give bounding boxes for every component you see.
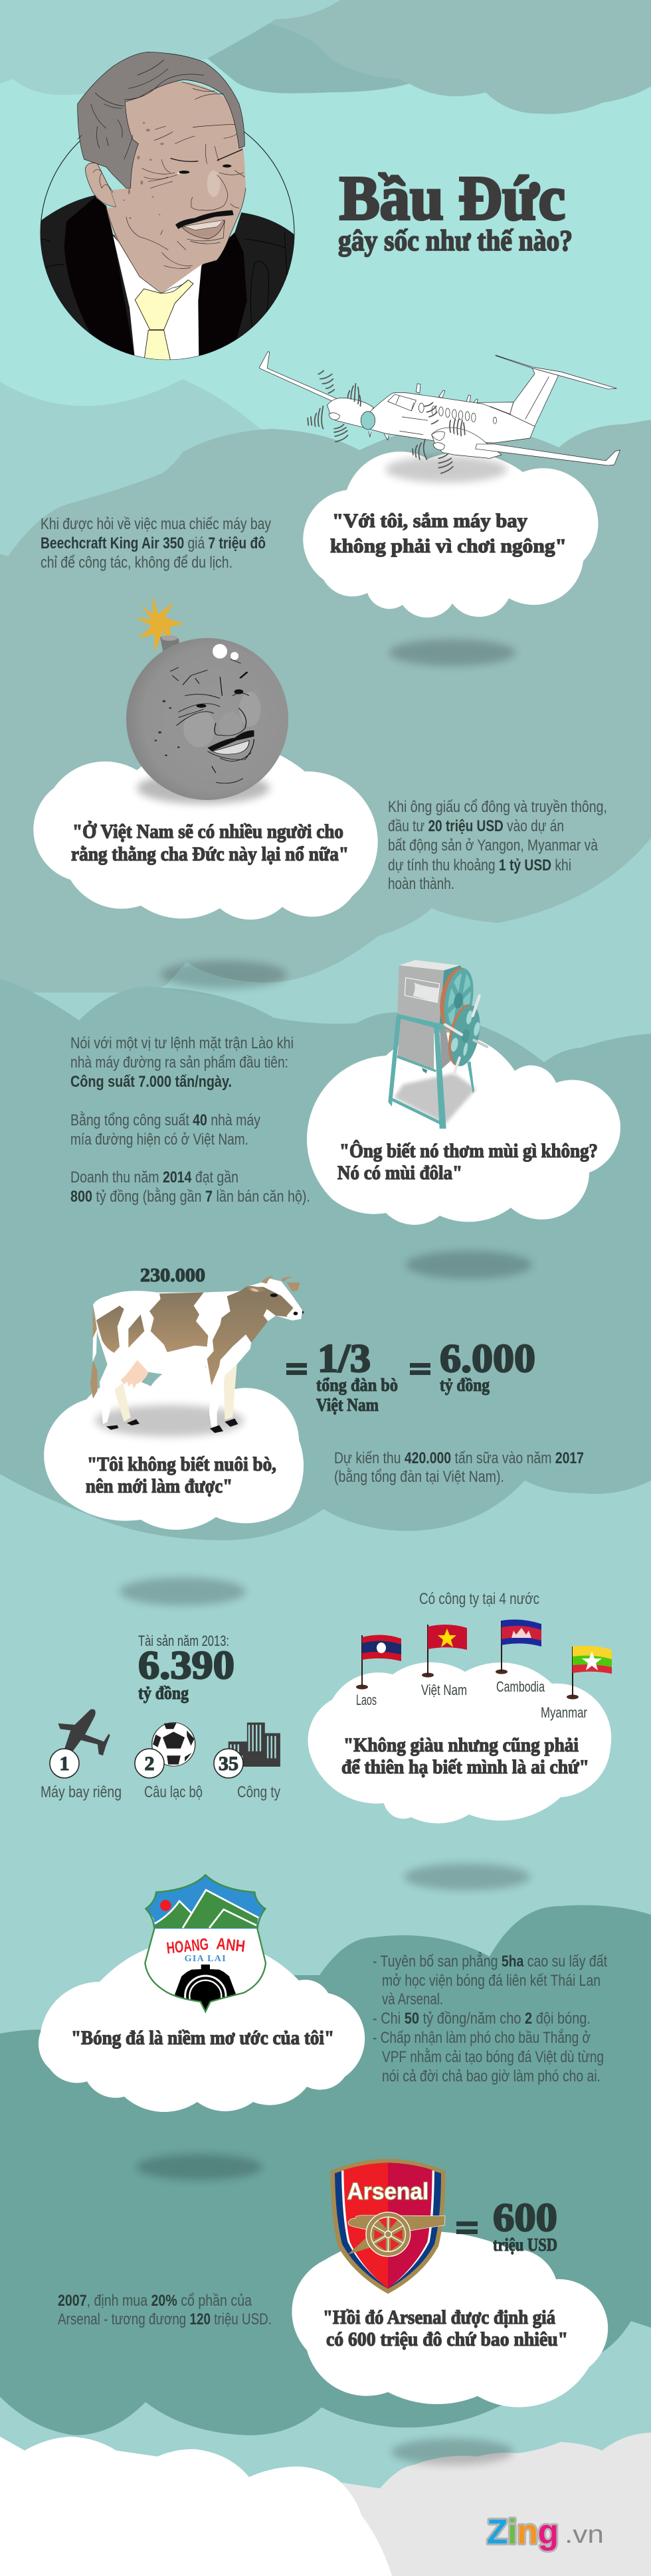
- quote: có 600 triệu đô chứ bao nhiêu": [326, 2328, 568, 2350]
- quote: "Ở Việt Nam sẽ có nhiều người cho: [72, 821, 343, 843]
- text: milk forecast: (bằng tổng đàn tại Việt Nam).: [334, 1468, 504, 1486]
- quote: [341, 1734, 589, 1778]
- icon group: plane, clubs, companies: [58, 1709, 280, 1767]
- icon: cow: [90, 1275, 304, 1433]
- flag: Cambodia: [496, 1619, 541, 1674]
- freckles: [123, 122, 164, 219]
- quote: "Với tôi, sắm máy bay: [332, 510, 527, 532]
- text: assets 2013: 6.390: [138, 1643, 234, 1687]
- text: football academy: [373, 1951, 607, 2085]
- equation: [286, 1336, 535, 1415]
- text: sugar mill facts: Công suất 7.000 tấn/ngày.: [70, 1073, 232, 1091]
- labels: assets: Công ty: [237, 1783, 280, 1801]
- equals sign: [286, 1363, 307, 1375]
- quote: [330, 510, 567, 557]
- text: Yangon investment: Khi ông giấu cổ đông và truyền thông,: [388, 798, 607, 816]
- text: sugar mill facts: [70, 1034, 310, 1206]
- portrait circle outline: [41, 106, 294, 360]
- cloud: cow quote: [44, 1365, 304, 1530]
- text: assets 2013: Tài sản năm 2013:: [138, 1633, 229, 1649]
- background cloud band: mid: [0, 979, 651, 1540]
- cloud: plane quote: [303, 451, 598, 617]
- labels: countries: Laos: [356, 1692, 377, 1708]
- club name: ANH: [215, 1935, 246, 1956]
- eyebrows: [171, 149, 242, 161]
- text: plane purchase: Khi được hỏi về việc mua chiếc máy bay: [41, 515, 271, 533]
- icon: bomb with face: [126, 596, 288, 800]
- label: total herd: tổng đàn bò: [316, 1375, 398, 1395]
- text: plane purchase: Beechcraft King Air 350 giá 7 triệu đô: [41, 534, 266, 552]
- text: companies in 4 countries: Có công ty tại 4 nước: [419, 1590, 539, 1608]
- quote: nên mới làm được": [86, 1475, 232, 1497]
- ear: [85, 163, 116, 207]
- eyes: [179, 171, 189, 174]
- text: sugar mill facts: Doanh thu năm 2014 đạt gần: [70, 1168, 238, 1186]
- quote: [337, 1140, 598, 1184]
- title: [338, 164, 573, 257]
- club name: HOANG: [165, 1935, 209, 1958]
- icon: plane: [58, 1709, 110, 1755]
- logo: Zing.vn: Zing: [487, 2513, 559, 2551]
- quote: "Không giàu nhưng cũng phải: [343, 1734, 579, 1756]
- cow shadow: [95, 1405, 244, 1437]
- logo: Zing.vn: .vn: [565, 2521, 604, 2549]
- quote: để thiên hạ biết mình là ai chứ": [341, 1756, 589, 1778]
- text: Yangon investment: [388, 798, 607, 893]
- cannon: [348, 2215, 445, 2231]
- logo: Arsenal crest: [330, 2159, 446, 2294]
- equals sign: [456, 2221, 478, 2234]
- text: Yangon investment: dự tính thu khoảng 1 tỷ USD khi: [388, 856, 571, 874]
- number: 600: 600: [493, 2196, 557, 2239]
- section: bomb: [33, 596, 607, 920]
- portrait: [40, 52, 294, 361]
- text: football academy: mở học viện bóng đá liên kết Thái Lan: [382, 1972, 601, 1990]
- section: assets: [41, 1633, 280, 1801]
- cloud: Arsenal quote: [292, 2231, 608, 2407]
- number: 6.000: 6.000: [440, 1336, 535, 1380]
- icon: football: [152, 1723, 195, 1766]
- quote: không phải vì chơi ngông": [330, 535, 567, 557]
- face: [106, 82, 246, 293]
- text: sugar mill facts: Bằng tổng công suất 40 nhà máy: [70, 1111, 260, 1129]
- text: Yangon investment: hoàn thành.: [388, 875, 454, 893]
- text: football academy: - Tuyên bố san phẳng 5ha cao su lấy đất: [373, 1951, 607, 1971]
- labels: countries: [356, 1678, 587, 1721]
- text: Arsenal stake: [58, 2292, 272, 2328]
- big wheel: [435, 965, 478, 1034]
- section: dairy cows: [44, 1265, 584, 1530]
- labels: countries: Cambodia: [496, 1678, 545, 1695]
- text: football academy: - Chi 50 tỷ đồng/năm cho 2 đội bóng.: [373, 2010, 591, 2028]
- quote: [71, 821, 349, 865]
- quote: rằng thằng cha Đức này lại nổ nữa": [71, 843, 349, 865]
- flag: Myanmar: [567, 1646, 612, 1700]
- nose highlight: [207, 171, 221, 197]
- badge: 2: 2: [145, 1753, 154, 1775]
- crest name: Arsenal: [347, 2179, 428, 2205]
- equation: 600 million USD: [456, 2196, 557, 2255]
- labels: assets: Máy bay riêng: [41, 1783, 122, 1801]
- bottom cloud: gray: [340, 2433, 651, 2576]
- text: plane purchase: [41, 515, 271, 572]
- labels: assets: [41, 1783, 280, 1801]
- drop shadows of floating clouds: [120, 639, 532, 2465]
- shadow under plane: [385, 456, 508, 483]
- badge: 35: [214, 1749, 243, 1778]
- mouth: [181, 220, 225, 239]
- icon: sugar cane press: [388, 960, 487, 1129]
- text: Arsenal stake: 2007, định mua 20% cổ phần của: [58, 2292, 252, 2310]
- logo: Zing.vn: [487, 2513, 604, 2551]
- quote: Nó có mùi đôla": [337, 1162, 462, 1184]
- cloud: countries quote: [308, 1662, 611, 1823]
- section: sugar mill: [70, 960, 620, 1225]
- text: assets 2013: tỷ đồng: [138, 1683, 189, 1703]
- text: plane purchase: chỉ để công tác, không để du lịch.: [41, 554, 232, 572]
- facial lines, wrinkles: [93, 124, 244, 268]
- badge: 1: 1: [60, 1753, 69, 1775]
- subheading: gây sốc như thế nào?: [338, 224, 573, 257]
- cloud: sugar quote: [307, 1032, 620, 1225]
- quote: [86, 1453, 276, 1497]
- badge: 1: [50, 1749, 79, 1778]
- label: total herd: Việt Nam: [316, 1395, 379, 1415]
- fraction 1/3: 1/3: [318, 1336, 371, 1380]
- number: 230.000: 230.000: [140, 1265, 205, 1286]
- text: milk forecast: [334, 1449, 584, 1486]
- moustache: [175, 210, 234, 229]
- fuse cap: [160, 636, 181, 657]
- text: Arsenal stake: Arsenal - tương đương 120 triệu USD.: [58, 2310, 272, 2328]
- text: assets 2013: [138, 1633, 234, 1703]
- background cloud band: dark: [0, 420, 651, 993]
- background cloud band: deep: [0, 1905, 651, 2435]
- labels: assets: Câu lạc bộ: [144, 1783, 203, 1801]
- section: Arsenal: [58, 2159, 608, 2407]
- text: football academy: và Arsenal.: [382, 1990, 443, 2008]
- cloud: football quote: [39, 1938, 365, 2112]
- logo: Hoang Anh Gia Lai: [145, 1875, 266, 2018]
- spark: [136, 596, 185, 653]
- text: Yangon investment: đầu tư 20 triệu USD vào dự án: [388, 817, 564, 835]
- quote: "Tôi không biết nuôi bò,: [87, 1453, 276, 1475]
- labels: countries: Myanmar: [541, 1704, 587, 1721]
- section: countries: [308, 1590, 612, 1823]
- section: football: [39, 1875, 607, 2112]
- section: private plane: [41, 352, 620, 617]
- labels: countries: Việt Nam: [421, 1682, 467, 1698]
- top clouds: [0, 0, 651, 114]
- hair: [78, 52, 244, 188]
- quote: "Hồi đó Arsenal được định giá: [323, 2306, 555, 2328]
- text: football academy: nói cả đời chả bao giờ làm phó cho ai.: [382, 2067, 601, 2085]
- icon: plane illustration: [260, 352, 620, 473]
- quote: "Bóng đá là niềm mơ ước của tôi": [71, 2027, 334, 2049]
- text: sugar mill facts: nhà máy đường ra sản phẩm đầu tiên:: [70, 1054, 288, 1072]
- handles: [445, 1024, 462, 1034]
- quote: "Ông biết nó thơm mùi gì không?: [339, 1140, 598, 1162]
- text: milk forecast: Dự kiến thu 420.000 tấn sữa vào năm 2017: [334, 1449, 584, 1467]
- small wheel: [443, 1002, 485, 1069]
- heading: Bầu Đức: Bầu Đức: [339, 164, 565, 233]
- label: million USD: triệu USD: [493, 2235, 557, 2255]
- flag: Vietnam: [422, 1625, 467, 1677]
- label: billion dong: tỷ đồng: [440, 1375, 490, 1395]
- cloud: bomb quote: [33, 741, 378, 920]
- text: sugar mill facts: 800 tỷ đồng (bằng gần 7 lần bán căn hộ).: [70, 1188, 310, 1206]
- flag: Laos: [356, 1635, 401, 1689]
- bomb shadow: [137, 772, 270, 804]
- text: Yangon investment: bất động sản ở Yangon, Myanmar và: [388, 837, 599, 854]
- badge: 35: 35: [219, 1753, 238, 1775]
- text: sugar mill facts: mía đường hiện có ở Việt Nam.: [70, 1131, 248, 1149]
- logo: Hoang Anh Gia Lai: GIA LAI: [185, 1954, 227, 1964]
- text: sugar mill facts: Nói với một vị tư lệnh mặt trận Lào khi: [70, 1034, 294, 1052]
- text: football academy: - Chấp nhận làm phó cho bầu Thắng ở: [373, 2029, 591, 2047]
- bottom cloud: white: [0, 2437, 392, 2576]
- equals sign: [410, 1363, 430, 1375]
- propeller motion strokes: [308, 370, 465, 473]
- quote: [323, 2306, 568, 2350]
- badge: 2: [135, 1749, 164, 1778]
- icon: buildings: [229, 1723, 280, 1767]
- label: total herd: [316, 1375, 398, 1415]
